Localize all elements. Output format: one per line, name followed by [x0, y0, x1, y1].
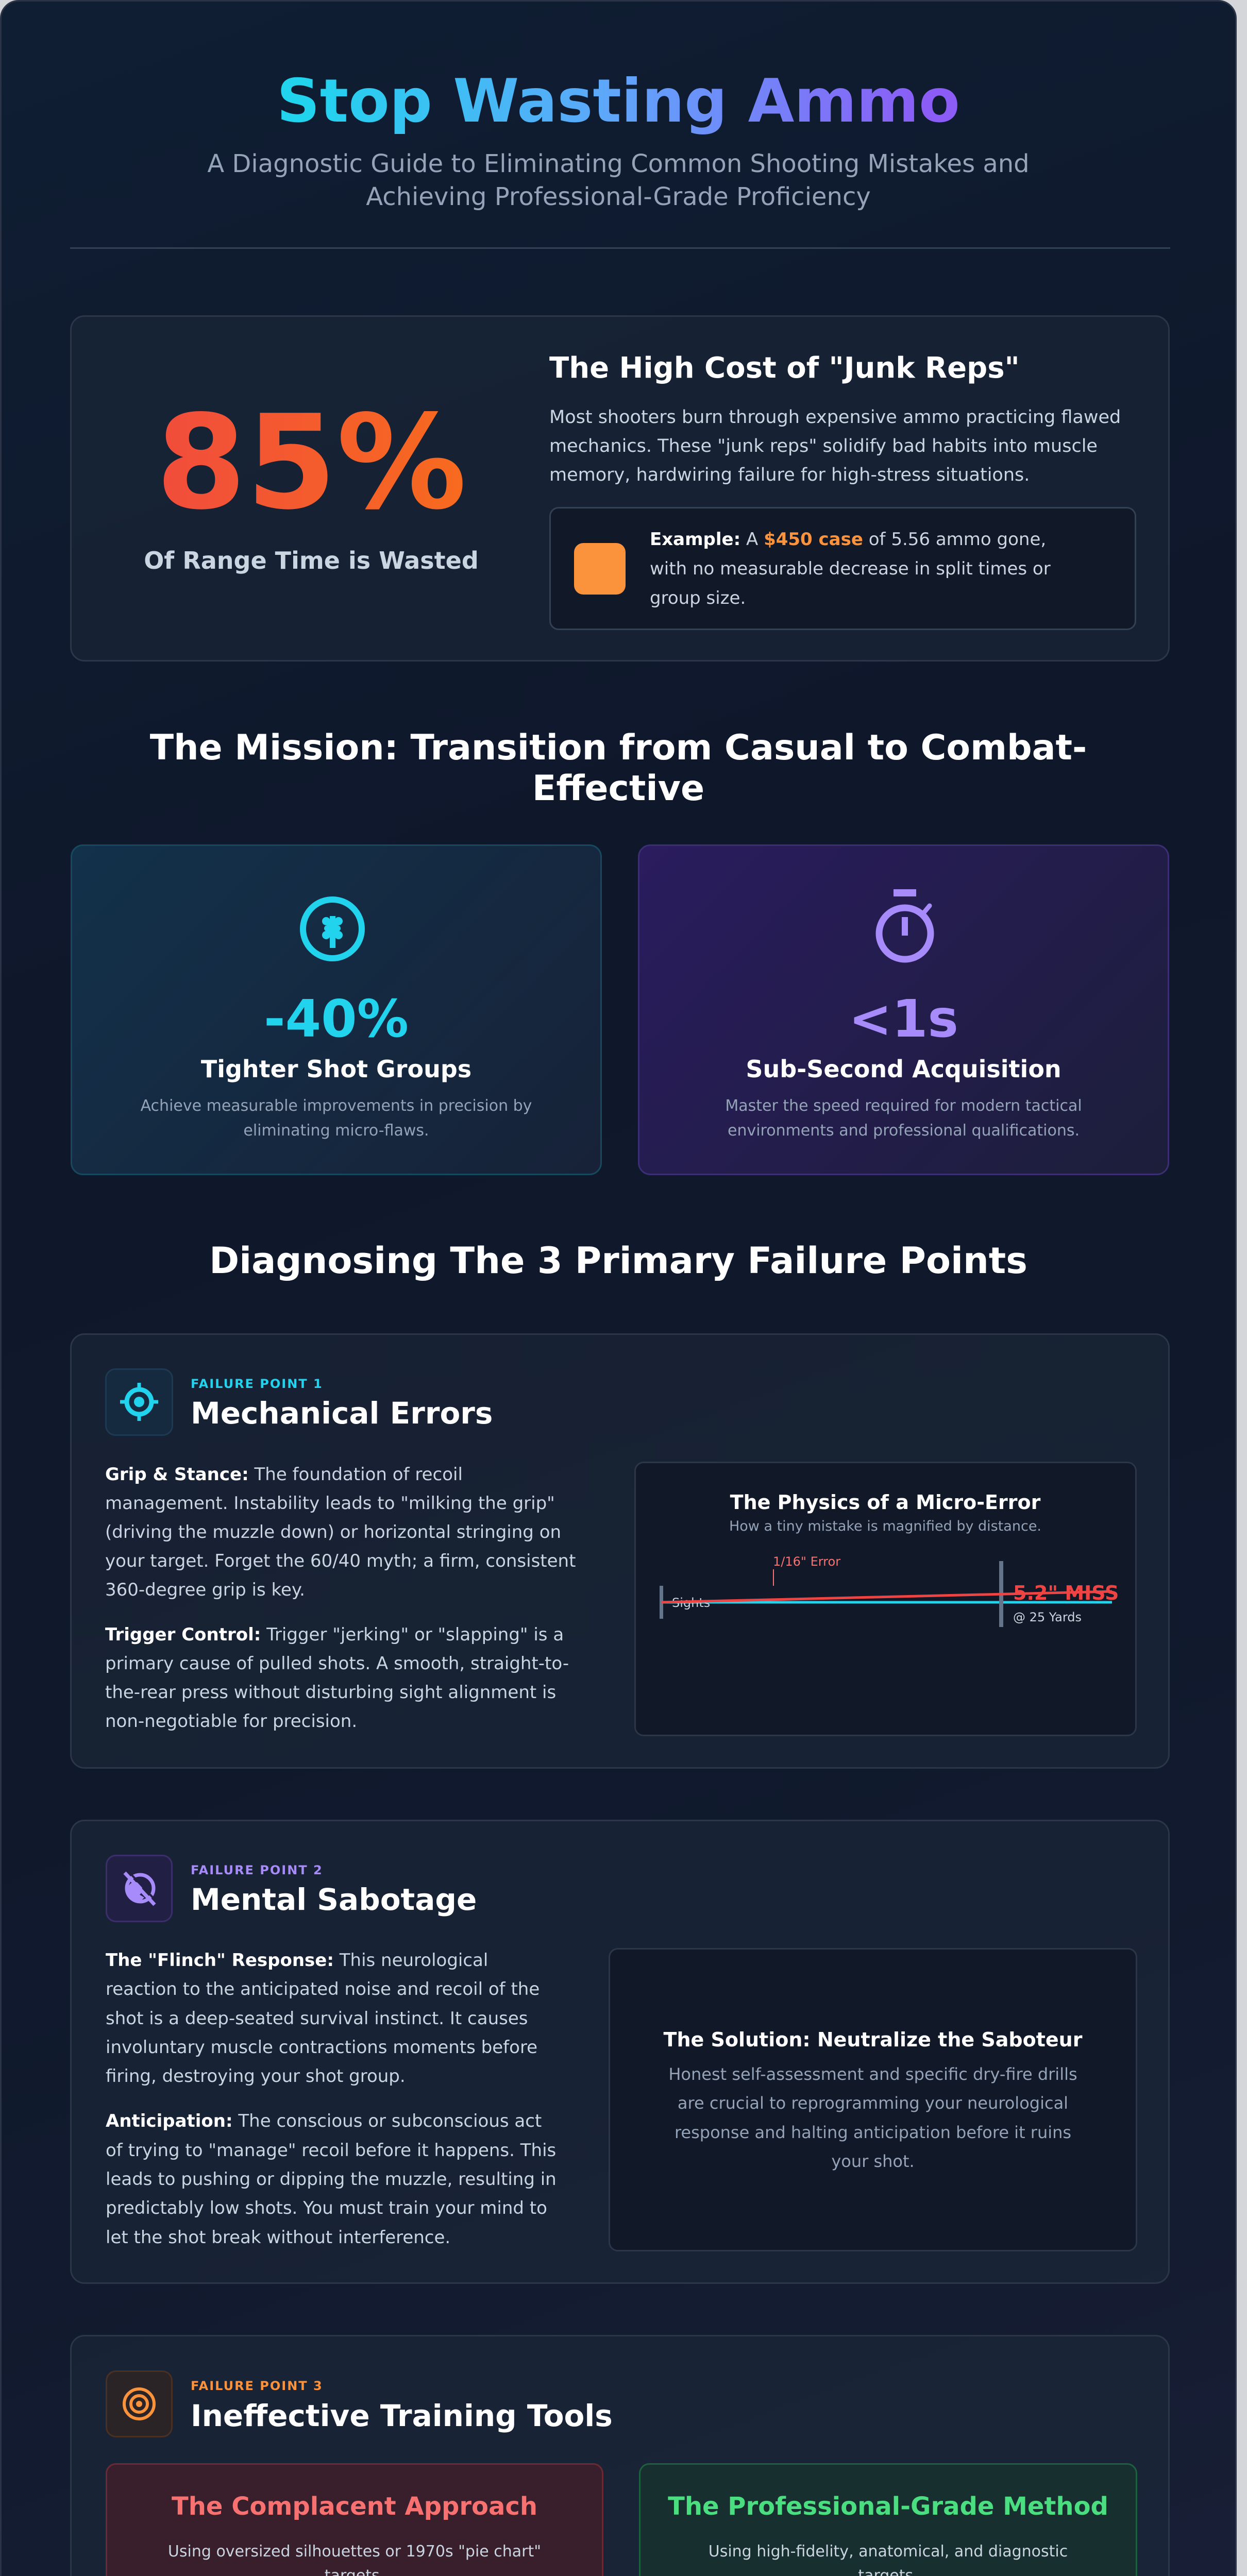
panel: tighter shot groups	[71, 844, 602, 1175]
heading: junk reps: The High Cost of "Junk Reps"	[549, 351, 1020, 385]
title: The Professional-Grade Method	[668, 2492, 1108, 2521]
heading: mission	[150, 727, 1087, 809]
text block: junk reps: mechanics. These "junk reps" solidify bad habits into muscle	[549, 436, 1098, 456]
icon: rings	[106, 2370, 173, 2437]
text block: junk reps	[549, 407, 1121, 485]
card text: eliminating micro-flaws.	[243, 1122, 429, 1140]
heading: mission: Effective	[532, 768, 704, 809]
title: The Complacent Approach	[172, 2492, 537, 2521]
text block: junk reps: Most shooters burn through expensive ammo practicing flawed	[549, 407, 1121, 428]
text block: flinch & anticipation: of trying to "manage" recoil before it happens. This	[106, 2140, 556, 2161]
icon: crosshair	[105, 1368, 173, 1436]
example text: group size.	[650, 588, 746, 608]
text block: grip & trigger: (driving the muzzle down) or horizontal stringing on	[105, 1522, 561, 1543]
callout: solution	[609, 1948, 1137, 2251]
text: Using high-fidelity, anatomical, and diagnostic	[709, 2543, 1068, 2561]
callout: example	[549, 507, 1136, 630]
text block: grip & trigger: management. Instability leads to "milking the grip"	[105, 1493, 555, 1514]
title: Stop Wasting Ammo	[277, 66, 960, 136]
text block: grip & trigger: the-rear press without disturbing sight alignment is	[105, 1682, 556, 1703]
panel: junk reps hero	[70, 315, 1170, 662]
solution text: your shot.	[831, 2151, 915, 2171]
chart: physics of a micro-error: 1/16" Error	[773, 1554, 840, 1569]
panel: professional-grade method	[639, 2463, 1137, 2576]
subtitle: Achieving Professional-Grade Proficiency	[366, 182, 871, 211]
text block: flinch & anticipation: involuntary muscle contractions moments before	[106, 2037, 537, 2058]
chart: physics of a micro-error	[634, 1462, 1137, 1736]
chart: physics of a micro-error: @ 25 Yards	[1013, 1610, 1082, 1624]
text block: flinch & anticipation: let the shot break without interference.	[106, 2227, 450, 2248]
icon: target group	[300, 896, 365, 961]
text block: grip & trigger: Trigger Control: Trigger "jerking" or "slapping" is a	[105, 1624, 564, 1645]
text	[168, 2543, 541, 2576]
panel: failure point 3	[70, 2335, 1170, 2576]
text block: flinch & anticipation: Anticipation: The conscious or subconscious act	[106, 2111, 542, 2131]
section title: Mechanical Errors	[191, 1396, 493, 1431]
card text: Achieve measurable improvements in precision by	[141, 1097, 532, 1115]
panel: failure point 1	[70, 1333, 1170, 1769]
card text	[140, 1097, 532, 1140]
card text	[725, 1097, 1082, 1140]
stat: 85%: 85%	[156, 387, 467, 538]
text block: grip & trigger: your target. Forget the 60/40 myth; a firm, consistent	[105, 1551, 576, 1571]
text block: flinch & anticipation: firing, destroying your shot group.	[106, 2066, 406, 2087]
panel: complacent approach	[106, 2463, 603, 2576]
label: FAILURE POINT 2	[191, 1863, 323, 1877]
text block: flinch & anticipation: The "Flinch" Response: This neurological	[106, 1950, 488, 1971]
panel: failure point 2	[70, 1820, 1170, 2284]
card text: Master the speed required for modern tactical	[725, 1097, 1082, 1115]
text block: flinch & anticipation: leads to pushing or dipping the muzzle, resulting in	[106, 2169, 557, 2190]
text block: grip & trigger: non-negotiable for precision.	[105, 1711, 357, 1732]
title	[2, 65, 1235, 138]
stat: 85%	[72, 388, 551, 538]
label: FAILURE POINT 3	[191, 2379, 323, 2393]
chart: physics of a micro-error: 5.2" MISS	[1013, 1582, 1119, 1604]
heading: failure points: Diagnosing The 3 Primary Failure Points	[209, 1240, 1027, 1282]
section title: Mental Sabotage	[191, 1882, 477, 1917]
icon: orange block	[574, 543, 626, 595]
chart: physics of a micro-error: Sights	[672, 1596, 710, 1610]
text	[709, 2543, 1068, 2576]
stat: -40%: -40%	[264, 989, 409, 1049]
card text: environments and professional qualifications.	[728, 1122, 1080, 1140]
solution text: are crucial to reprogramming your neurological	[678, 2093, 1068, 2113]
example text: Example: A $450 case of 5.56 ammo gone,	[650, 529, 1046, 550]
subtitle: A Diagnostic Guide to Eliminating Common Shooting Mistakes and	[207, 149, 1030, 178]
panel: sub-second acquisition	[638, 844, 1169, 1175]
example text	[650, 529, 1051, 608]
text block: flinch & anticipation: predictably low shots. You must train your mind to	[106, 2198, 547, 2218]
chart: physics of a micro-error: How a tiny mistake is magnified by distance.	[729, 1518, 1041, 1534]
example text: with no measurable decrease in split times or	[650, 558, 1051, 579]
card title: Sub-Second Acquisition	[746, 1055, 1061, 1083]
solution text	[668, 2064, 1077, 2171]
stat label: Of Range Time is Wasted	[144, 547, 479, 574]
text block: grip & trigger: 360-degree grip is key.	[105, 1580, 305, 1600]
solution text: response and halting anticipation before it ruins	[675, 2123, 1071, 2142]
text block: flinch & anticipation: reaction to the anticipated noise and recoil of the	[106, 1979, 540, 1999]
text block: grip & trigger: primary cause of pulled shots. A smooth, straight-to-	[105, 1653, 569, 1674]
text block: flinch & anticipation: shot is a deep-seated survival instinct. It causes	[106, 2008, 528, 2029]
stat: <1s: <1s	[849, 989, 958, 1049]
icon: stopwatch	[876, 889, 934, 962]
solution text: Honest self-assessment and specific dry-fire drills	[668, 2064, 1077, 2084]
subtitle	[207, 149, 1030, 211]
chart: physics of a micro-error: The Physics of a Micro-Error	[730, 1491, 1041, 1514]
solution title: The Solution: Neutralize the Saboteur	[664, 2028, 1082, 2051]
card title: Tighter Shot Groups	[201, 1055, 471, 1083]
text: Using oversized silhouettes or 1970s "pie chart"	[168, 2543, 541, 2561]
text block: grip & trigger: Grip & Stance: The foundation of recoil	[105, 1464, 463, 1485]
label: FAILURE POINT 1	[191, 1377, 323, 1391]
icon: flinch	[106, 1855, 173, 1922]
section title: Ineffective Training Tools	[191, 2398, 613, 2433]
heading: mission: The Mission: Transition from Casual to Combat-	[150, 727, 1087, 768]
text block: junk reps: memory, hardwiring failure for high-stress situations.	[549, 465, 1030, 485]
text block: flinch & anticipation	[106, 1950, 557, 2248]
text block: grip & trigger	[105, 1464, 576, 1732]
